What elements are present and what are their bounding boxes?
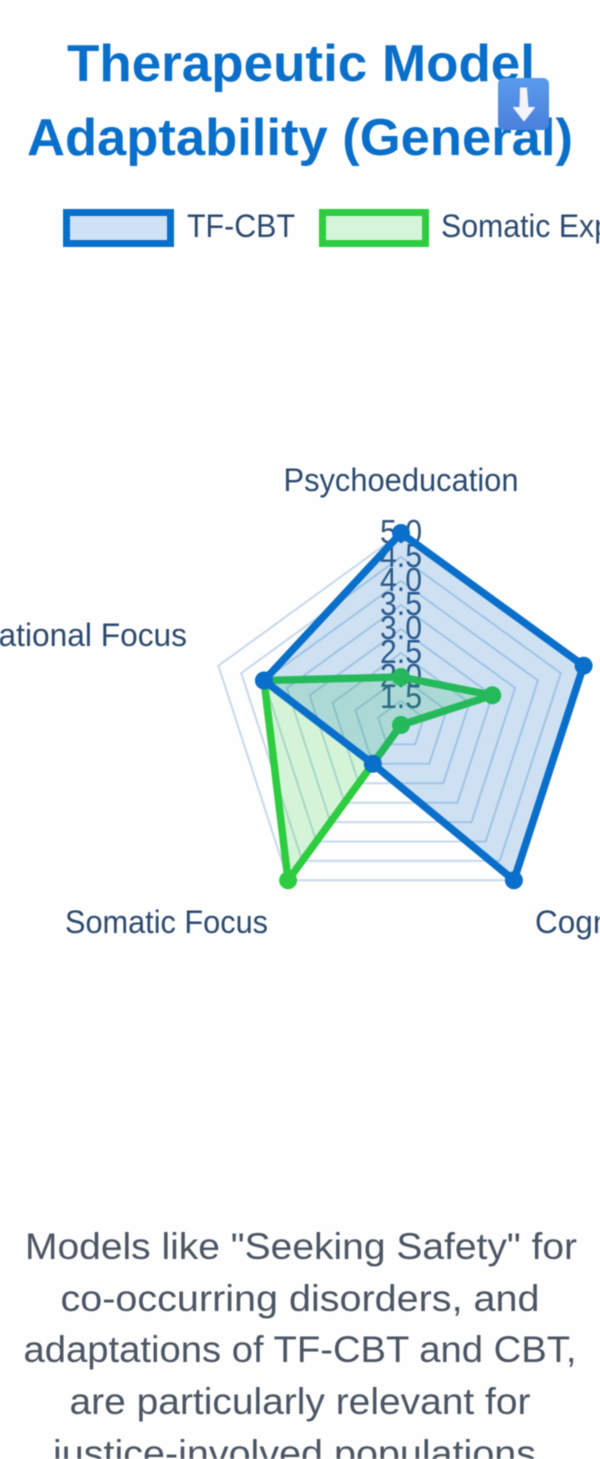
description text: Models like "Seeking Safety" for [25, 1226, 577, 1267]
axis tick labels: 4.0 [380, 561, 422, 598]
legend item: TF-CBT: TF-CBT [187, 208, 295, 244]
axis tick labels: 3.0 [380, 609, 422, 646]
description text [24, 1226, 577, 1459]
axis tick labels [380, 513, 422, 715]
icon: download arrow [498, 78, 549, 130]
axis labels [0, 462, 600, 940]
axis tick labels: 5.0 [380, 513, 422, 550]
axis tick labels: 3.5 [380, 585, 422, 622]
axis tick labels: 2.5 [380, 633, 422, 670]
legend [66, 208, 600, 244]
legend item: Somatic Experiencing [322, 208, 600, 244]
axis labels: Somatic Focus [65, 904, 268, 940]
axis tick labels: 4.5 [380, 537, 422, 574]
title [27, 35, 573, 167]
axis tick labels: 1.5 [380, 678, 422, 715]
title: Therapeutic Model [67, 35, 535, 93]
data series: TF-CBT [255, 524, 593, 889]
radar chart [0, 462, 600, 940]
axis tick labels: 2.0 [380, 657, 422, 694]
description text: co-occurring disorders, and [60, 1278, 540, 1319]
data series: Somatic Experiencing [255, 668, 501, 889]
description text: adaptations of TF-CBT and CBT, [24, 1329, 576, 1370]
axis labels: Psychoeducation [284, 462, 518, 498]
description text: are particularly relevant for [70, 1381, 530, 1422]
grid rings [218, 533, 584, 880]
legend item: TF-CBT [66, 208, 295, 244]
title: Adaptability (General) [27, 109, 573, 167]
